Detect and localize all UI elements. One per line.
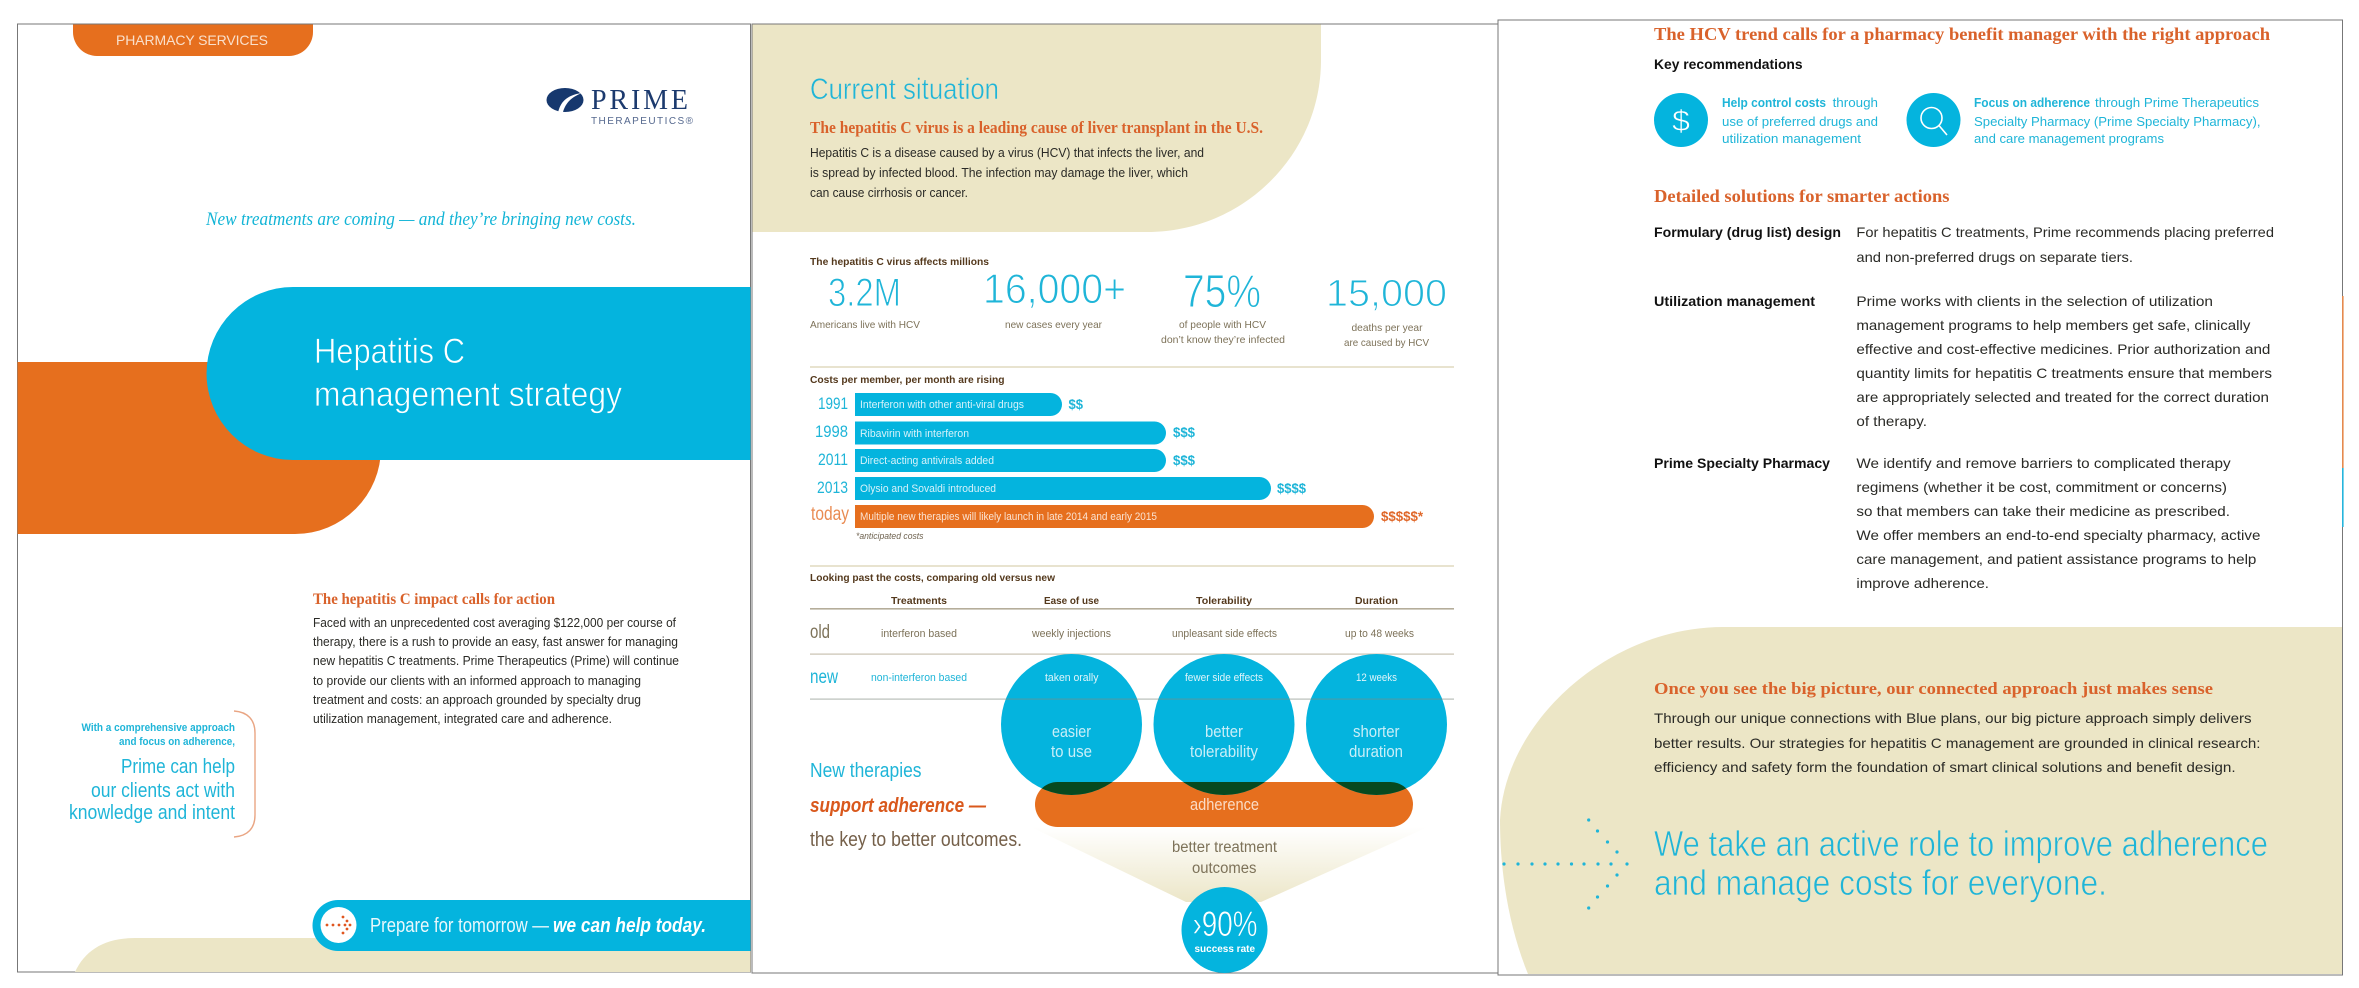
recommendation: focus on adherence [1906, 93, 2260, 147]
pill: adherence: adherence [1190, 795, 1259, 814]
bar: today [811, 504, 1424, 528]
text block: impact: treatment and costs: an approach grounded by specialty drug [313, 693, 641, 707]
heading: key recommendations: Key recommendations [1654, 57, 1803, 72]
bar: today: today [811, 504, 849, 525]
circle: better tolerability: fewer side effects [1185, 672, 1263, 684]
table row: old [810, 622, 1414, 643]
panel: big picture: Once you see the big picture, our connected approach just makes sense [1654, 679, 2213, 698]
solution: prime specialty pharmacy: regimens (whether it be cost, commitment or concerns) [1856, 479, 2227, 495]
bar: 2013: Olysio and Sovaldi introduced [860, 483, 996, 495]
bar: 1998: Ribavirin with interferon [860, 428, 969, 440]
table header row: Duration [1355, 595, 1398, 607]
solution: utilization management [1654, 293, 2272, 429]
panel: big picture: Through our unique connections with Blue plans, our big picture approach simply delivers [1654, 710, 2252, 726]
stat: 15,000: are caused by HCV [1344, 337, 1429, 349]
text block: impact: Faced with an unprecedented cost averaging $122,000 per course of [313, 616, 676, 630]
heading: HCV trend: The HCV trend calls for a pharmacy benefit manager with the right approach [1654, 24, 2270, 44]
solution: formulary design [1654, 224, 2274, 265]
shape: beige footer corner [75, 938, 750, 972]
bar: 2011: $$$ [1173, 452, 1195, 468]
shape: beige header [752, 24, 1321, 232]
solution: prime specialty pharmacy: improve adherence. [1856, 575, 1989, 591]
table row: new [810, 667, 967, 688]
stat: 75%: 75% [1183, 265, 1261, 317]
funnel: better treatment outcomes [1031, 827, 1428, 902]
recommendation: control costs: use of preferred drugs and [1722, 115, 1878, 129]
solution: prime specialty pharmacy: Prime Specialty Pharmacy [1654, 455, 1830, 471]
text block: HCV intro: is spread by infected blood. The infection may damage the liver, which [810, 166, 1188, 180]
recommendation: control costs: Help control costs [1722, 96, 1826, 110]
text block: impact: utilization management, integrated care and adherence. [313, 712, 612, 726]
recommendation: focus on adherence: and care management programs [1974, 132, 2164, 146]
callout: Prime can help: knowledge and intent [69, 802, 235, 824]
panel: big picture: better results. Our strategies for hepatitis C management are grounded in clinical research: [1654, 735, 2260, 751]
callout: Prime can help: Prime can help [121, 756, 235, 778]
callout: Prime can help [69, 711, 255, 837]
tab: pharmacy services: PHARMACY SERVICES [116, 32, 268, 48]
circle: easier to use [1001, 654, 1142, 795]
circle: success rate [1182, 887, 1268, 973]
solution: utilization management: of therapy. [1856, 413, 1927, 429]
table row: new: new [810, 667, 838, 688]
logo: Prime Therapeutics [546, 85, 694, 127]
heading: current situation: Current situation [810, 73, 999, 106]
text block: impact: new hepatitis C treatments. Prime Therapeutics (Prime) will continue [313, 654, 679, 668]
panel: title banner: Hepatitis C [314, 332, 465, 371]
text block: new therapies support adherence: support adherence — [810, 795, 987, 817]
funnel: better treatment outcomes: better treatment [1172, 839, 1278, 856]
table heading: old versus new: Looking past the costs, comparing old versus new [810, 572, 1056, 584]
bar: today: Multiple new therapies will likely launch in late 2014 and early 2015 [860, 511, 1157, 523]
callout: Prime can help: and focus on adherence, [119, 736, 235, 748]
bar: 1998: $$$ [1173, 424, 1195, 440]
stat: 16,000+ [983, 265, 1126, 331]
stat: 15,000 [1326, 273, 1447, 349]
circle: better tolerability: tolerability [1190, 742, 1258, 761]
text block: new therapies support adherence: the key to better outcomes. [810, 829, 1022, 851]
text block: new therapies support adherence [810, 760, 1022, 851]
bar: 1991: $$ [1068, 396, 1083, 412]
panel: big picture: efficiency and safety form the foundation of smart clinical solutions and benefit design. [1654, 759, 2236, 775]
circle: shorter duration: duration [1349, 742, 1403, 761]
solution: prime specialty pharmacy: so that members can take their medicine as prescribed. [1856, 503, 2230, 519]
circle: success rate: success rate [1194, 943, 1255, 955]
bar: 2013 [817, 477, 1306, 500]
banner: prepare for tomorrow [313, 900, 750, 951]
stat: 16,000+: new cases every year [1005, 319, 1102, 331]
solution: utilization management: Utilization management [1654, 293, 1815, 309]
logo: Prime Therapeutics: PRIME [591, 85, 688, 116]
stats: HCV affects millions [810, 256, 1447, 349]
solution: utilization management: are appropriately selected and treated for the correct duration [1856, 389, 2269, 405]
text block: new therapies support adherence: New therapies [810, 760, 922, 782]
bar: 1991: 1991 [818, 394, 848, 413]
text block: HCV intro [810, 118, 1263, 200]
icon: dotted arrow [1502, 818, 1629, 910]
bar: 1998: 1998 [815, 422, 848, 441]
stat: 15,000: deaths per year [1352, 322, 1423, 334]
circle: shorter duration: shorter [1353, 722, 1400, 741]
icon: dollar: $ [1672, 105, 1690, 138]
stats: HCV affects millions: The hepatitis C virus affects millions [810, 256, 989, 268]
bar: 2013: $$$$ [1277, 480, 1306, 496]
bar: 2011 [818, 449, 1195, 472]
table row: old: unpleasant side effects [1172, 628, 1277, 640]
circle: easier to use: taken orally [1045, 672, 1099, 684]
funnel: better treatment outcomes: outcomes [1192, 860, 1257, 877]
recommendation: focus on adherence: Specialty Pharmacy (Prime Specialty Pharmacy), [1974, 115, 2260, 129]
solution: utilization management: management programs to help members get safe, clinically [1856, 317, 2250, 333]
table header row: Treatments [891, 595, 947, 607]
text block: HCV intro: The hepatitis C virus is a leading cause of liver transplant in the U.S. [810, 118, 1263, 137]
stat: 15,000: 15,000 [1326, 273, 1447, 315]
bar: 2011: Direct-acting antivirals added [860, 455, 994, 467]
text block: HCV intro: Hepatitis C is a disease caused by a virus (HCV) that infects the liver, and [810, 146, 1204, 160]
text block: HCV intro: can cause cirrhosis or cancer. [810, 186, 968, 200]
stat: 3.2M [810, 271, 920, 331]
panel: cover page [18, 24, 750, 972]
circle: better tolerability [1154, 654, 1294, 795]
panel: title banner [207, 287, 750, 460]
solution: formulary design: and non-preferred drugs on separate tiers. [1856, 249, 2133, 265]
panel: recommendations page [1498, 20, 2344, 975]
shape: orange band [18, 362, 381, 534]
banner: prepare for tomorrow: Prepare for tomorrow — [370, 915, 549, 937]
callout: Prime can help: With a comprehensive approach [82, 722, 235, 734]
stat: 75%: of people with HCV [1179, 319, 1266, 331]
circle: shorter duration: 12 weeks [1356, 672, 1397, 684]
stat: 75%: don’t know they’re infected [1161, 334, 1285, 346]
stat: 16,000+: 16,000+ [983, 265, 1126, 312]
bar: today: $$$$$* [1381, 508, 1424, 524]
table row: new: non-interferon based [871, 672, 967, 684]
solution: formulary design: Formulary (drug list) design [1654, 224, 1841, 240]
bar chart: costs per member: *anticipated costs [856, 531, 924, 542]
bar: 1991: Interferon with other anti-viral drugs [860, 399, 1024, 411]
table header row [891, 595, 1398, 607]
tagline: New treatments are coming — and they’re bringing new costs. [205, 209, 636, 230]
banner: prepare for tomorrow: we can help today. [553, 915, 706, 937]
bar: 2013: 2013 [817, 478, 848, 497]
bar chart: costs per member [810, 374, 1424, 542]
recommendation: focus on adherence: Focus on adherence [1974, 96, 2090, 110]
circle: easier to use: to use [1051, 742, 1092, 761]
icon: dotted arrow [320, 907, 356, 943]
statement: active role: and manage costs for everyone. [1654, 862, 2107, 903]
recommendation: focus on adherence: through Prime Therapeutics [2095, 96, 2259, 110]
solution: prime specialty pharmacy: care management, and patient assistance programs to help [1856, 551, 2257, 567]
stat: 3.2M: 3.2M [828, 271, 901, 315]
text block: impact [313, 591, 679, 726]
panel: big picture [1500, 627, 2342, 974]
circle: better tolerability: better [1205, 722, 1243, 741]
solution: prime specialty pharmacy: We offer members an end-to-end specialty pharmacy, active [1856, 527, 2261, 543]
circle: success rate: ›90% [1192, 905, 1258, 944]
solution: utilization management: quantity limits for hepatitis C treatments ensure that members [1856, 365, 2272, 381]
statement: active role: We take an active role to improve adherence [1654, 823, 2268, 864]
recommendation: control costs: utilization management [1722, 132, 1862, 146]
table row: old: old [810, 622, 830, 643]
stat: 75% [1161, 265, 1285, 346]
statement: active role [1654, 823, 2268, 903]
icon: magnifier [1906, 93, 1960, 147]
tab: pharmacy services [73, 24, 313, 56]
icon: dollar [1654, 93, 1708, 147]
table header row: Ease of use [1044, 595, 1099, 607]
bar: 1998 [815, 422, 1195, 444]
panel: title banner: management strategy [314, 375, 622, 414]
recommendation: control costs: through [1833, 96, 1878, 110]
solution: utilization management: effective and cost-effective medicines. Prior authorization and [1856, 341, 2270, 357]
panel: current situation page [752, 24, 1498, 973]
solution: prime specialty pharmacy [1654, 455, 2261, 591]
callout: Prime can help: our clients act with [91, 780, 235, 802]
table row: old: up to 48 weeks [1345, 628, 1414, 640]
solution: utilization management: Prime works with clients in the selection of utilization [1856, 293, 2213, 309]
solution: prime specialty pharmacy: We identify and remove barriers to complicated therapy [1856, 455, 2231, 471]
solution: formulary design: For hepatitis C treatments, Prime recommends placing preferred [1856, 224, 2274, 240]
text block: impact: to provide our clients with an informed approach to managing [313, 674, 641, 688]
circle: easier to use: easier [1052, 722, 1091, 741]
stat: 3.2M: Americans live with HCV [810, 319, 920, 331]
table header row: Tolerability [1196, 595, 1252, 607]
pill: adherence [1035, 782, 1413, 827]
heading: detailed solutions: Detailed solutions for smarter actions [1654, 186, 1950, 206]
text block: impact: therapy, there is a rush to provide an easy, fast answer for managing [313, 635, 678, 649]
bar: 1991 [818, 393, 1083, 416]
logo: Prime Therapeutics: THERAPEUTICS® [591, 116, 694, 127]
table row: old: interferon based [881, 628, 957, 640]
recommendation: control costs [1654, 93, 1878, 147]
bar: 2011: 2011 [818, 450, 848, 469]
bar chart: costs per member: Costs per member, per month are rising [810, 374, 1004, 386]
circle: shorter duration [1306, 654, 1447, 795]
table row: old: weekly injections [1031, 628, 1111, 640]
text block: impact: The hepatitis C impact calls for action [313, 591, 555, 608]
